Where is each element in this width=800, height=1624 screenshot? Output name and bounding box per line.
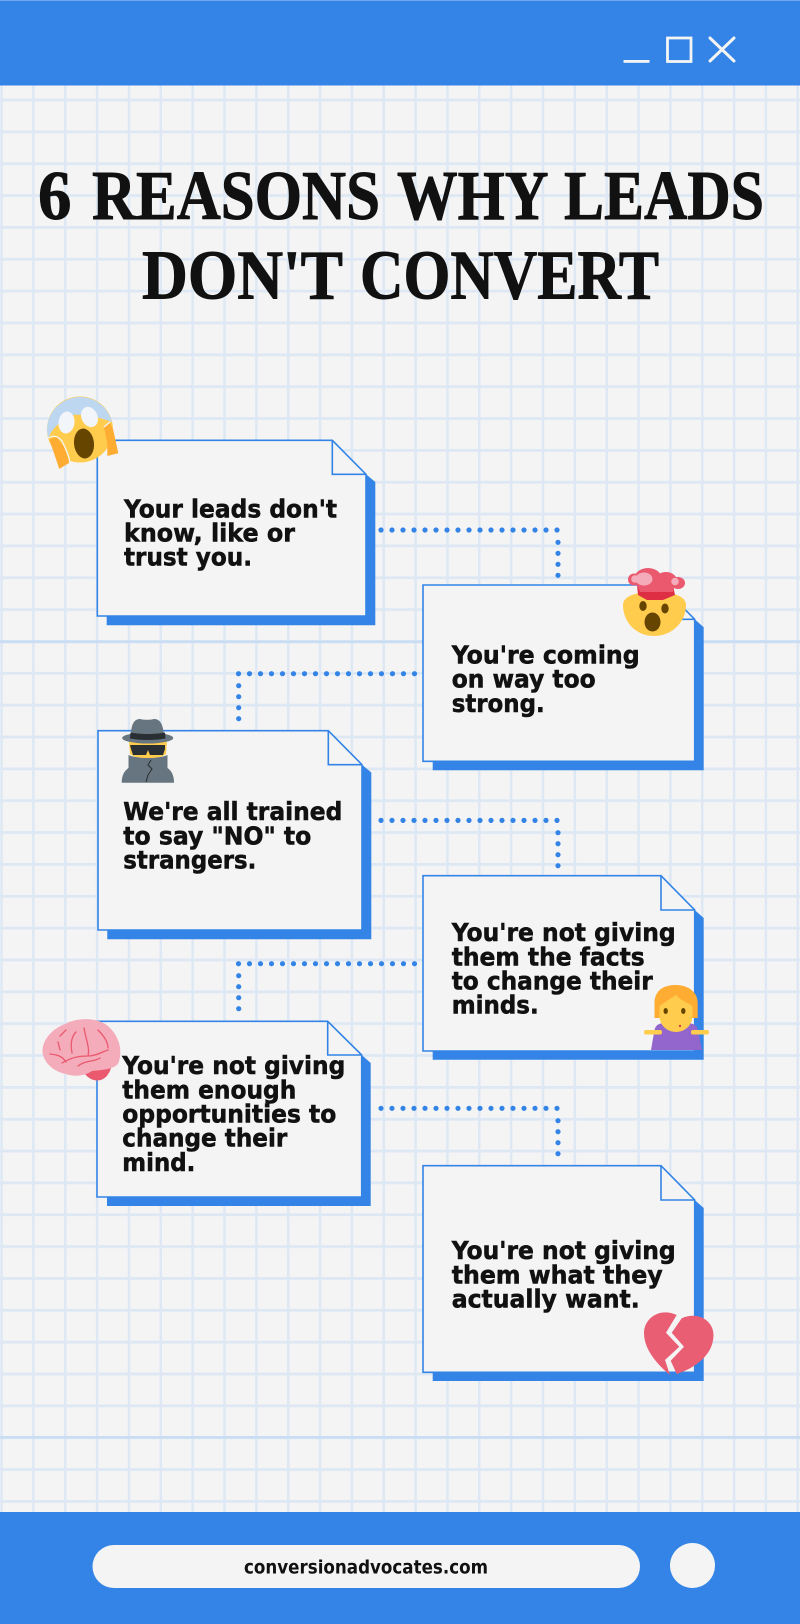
panel: reason 4 (423, 876, 704, 1060)
footer bar (0, 1512, 800, 1624)
icon: maximize (668, 38, 691, 62)
text: reason 2 (451, 640, 640, 718)
header bar (0, 0, 800, 86)
url pill (92, 1545, 640, 1588)
icon: shrugging woman emoji (644, 985, 709, 1050)
icon: minimize (624, 60, 650, 63)
text: reason 6: You're not giving (451, 1236, 676, 1265)
panel: reason 2 (423, 585, 704, 770)
text: reason 4: You're not giving (451, 918, 676, 947)
title: LEADS (564, 158, 764, 235)
title: WHY (397, 158, 548, 235)
text: reason 4 (451, 918, 676, 1019)
text: reason 2: You're coming (451, 640, 640, 669)
text: reason 1: trust you. (124, 543, 252, 572)
title: 6 (38, 158, 72, 235)
text: reason 2: on way too (452, 665, 596, 694)
text: reason 3: to say "NO" to (123, 821, 311, 850)
title: CONVERT (360, 238, 659, 315)
icon: brain emoji (42, 1019, 120, 1080)
connector: card 3 to card 4 (381, 820, 558, 866)
connector: card 1 to card 2 (381, 530, 558, 576)
icon: screaming face emoji (47, 396, 118, 469)
text: reason 4: to change their (452, 966, 653, 995)
text: reason 5 (121, 1051, 345, 1177)
text: reason 4: them the facts (452, 942, 645, 971)
text: reason 3 (123, 797, 342, 875)
text: reason 5: change their (122, 1124, 288, 1153)
panel: reason 3 (98, 731, 371, 939)
icon: exploding head emoji (623, 568, 686, 636)
panel: reason 5 (97, 1021, 371, 1206)
text: reason 5: opportunities to (122, 1100, 336, 1129)
text: reason 3: strangers. (123, 846, 256, 875)
panel: reason 1 (97, 440, 375, 625)
connector: card 5 to card 6 (381, 1108, 558, 1155)
text: reason 5: mind. (122, 1148, 195, 1177)
text: reason 1: know, like or (124, 519, 296, 548)
icon: close (710, 38, 734, 61)
panel: reason 6 (423, 1166, 704, 1381)
url pill: conversionadvocates.com (244, 1556, 488, 1578)
title: DON'T (142, 238, 343, 315)
title: REASONS (92, 158, 380, 235)
text: reason 1 (123, 495, 337, 572)
connector: card 2 to card 3 (238, 674, 415, 720)
connector: card 4 to card 5 (238, 964, 415, 1010)
text: reason 5: You're not giving (121, 1051, 345, 1080)
text: reason 6: actually want. (452, 1284, 640, 1313)
text: reason 1: Your leads don't (123, 495, 337, 524)
icon: broken heart emoji (644, 1312, 714, 1375)
round button (670, 1543, 715, 1588)
text: reason 6: them what they (452, 1260, 663, 1289)
icon: detective emoji (122, 719, 174, 783)
text: reason 4: minds. (452, 990, 539, 1019)
text: reason 5: them enough (122, 1075, 296, 1104)
title (38, 158, 764, 315)
text: reason 3: We're all trained (123, 797, 342, 826)
text: reason 6 (451, 1236, 676, 1313)
text: reason 2: strong. (452, 689, 545, 718)
